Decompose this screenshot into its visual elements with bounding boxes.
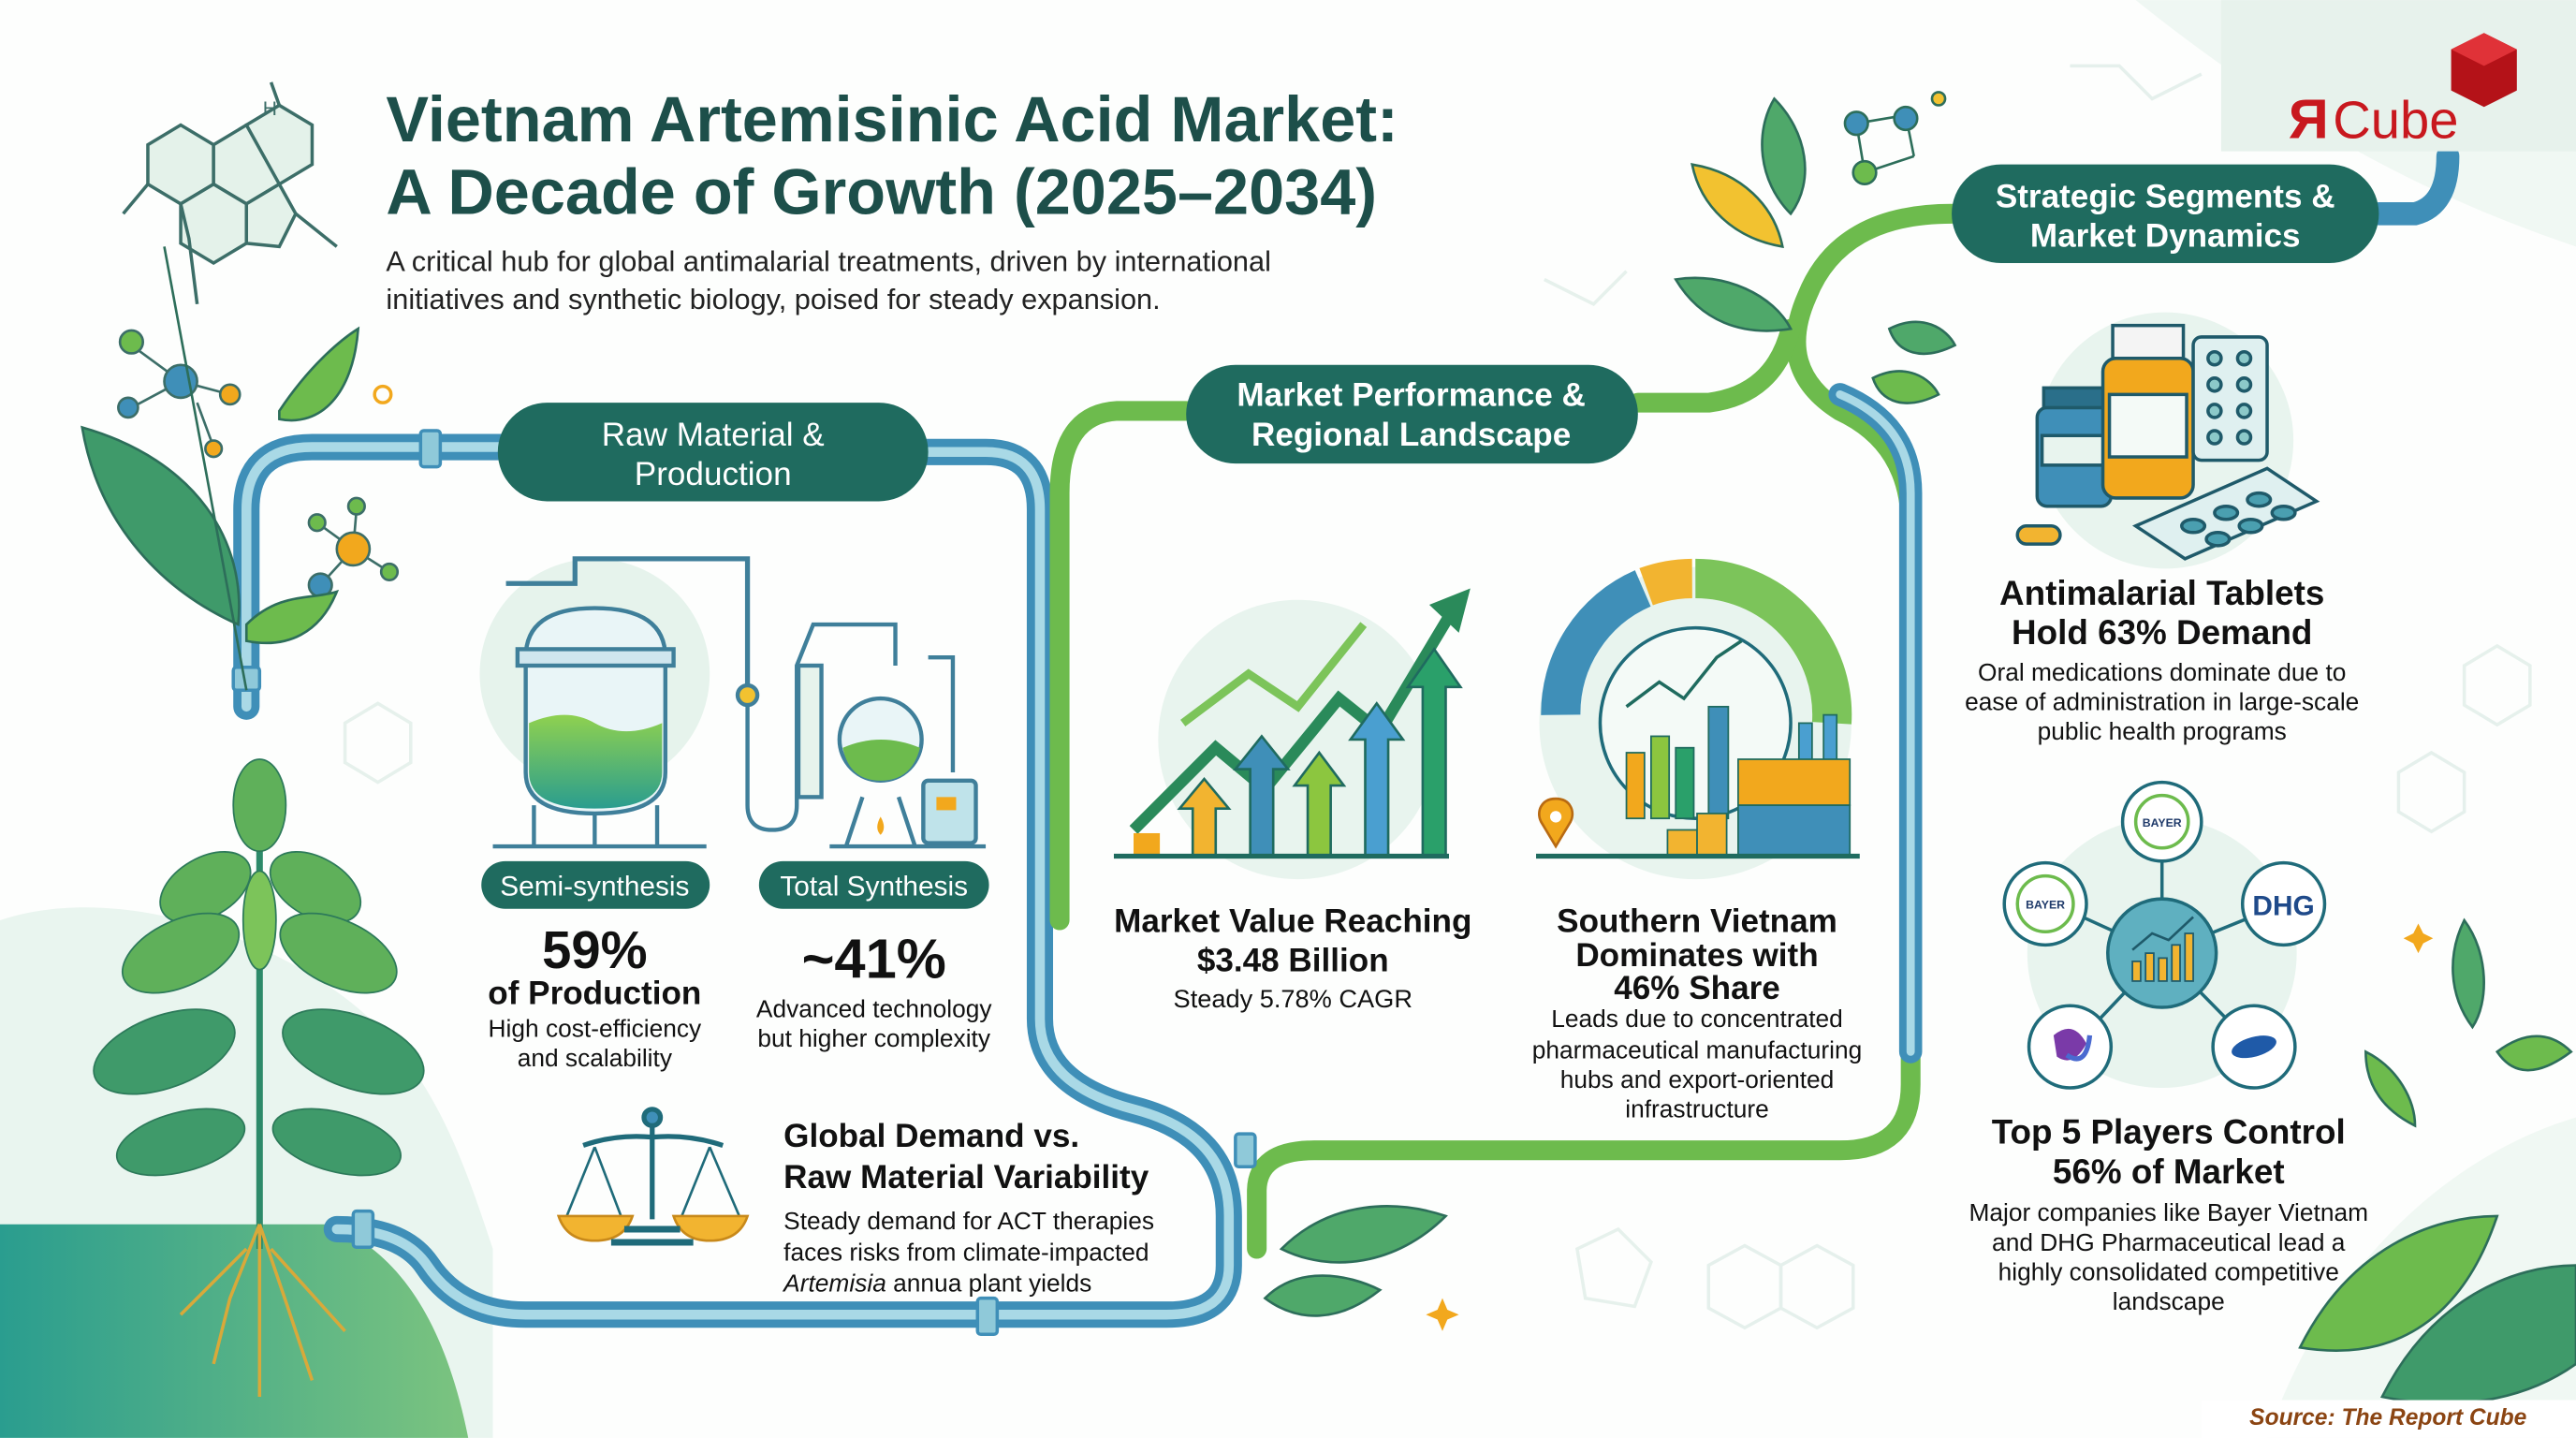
stat: 59% (488, 920, 702, 1072)
text: top 5 players (1969, 1113, 2368, 1315)
text: top 5 players: Top 5 Players Control (1992, 1113, 2346, 1152)
logo: RCube: Cube (2333, 91, 2458, 150)
stat: 59%: and scalability (518, 1044, 673, 1072)
icon: balance scale (559, 1109, 748, 1242)
pill: total synthesis (759, 861, 989, 909)
text: market value: $3.48 Billion (1197, 942, 1389, 978)
text: global demand: Raw Material Variability (783, 1159, 1149, 1196)
logo: RCube (2221, 0, 2576, 152)
pill: semi-synthesis (481, 861, 710, 909)
pill: semi-synthesis: Semi-synthesis (500, 872, 689, 902)
text: southern vietnam: Southern Vietnam (1557, 902, 1837, 939)
chart: growth arrows (1114, 588, 1471, 879)
icon: player network (2004, 783, 2324, 1088)
icon: player network: BAYER (2026, 899, 2065, 912)
text: market value: Steady 5.78% CAGR (1174, 984, 1412, 1013)
pipe network (233, 156, 2448, 1334)
text: southern vietnam: 46% Share (1614, 970, 1780, 1006)
sparkles (1426, 924, 2433, 1331)
icon: molecules left (118, 330, 398, 596)
text: global demand: Global Demand vs. (783, 1118, 1079, 1154)
icon: reactor and flasks (479, 559, 986, 846)
text: southern vietnam: Dominates with (1575, 937, 1819, 974)
icon: medicine bottles and tablets (2017, 313, 2317, 568)
pill: raw material: Production (635, 456, 792, 492)
pill: raw material (498, 403, 929, 501)
text: antimalarial tablets (1965, 574, 2359, 745)
logo: RCube: Я (2289, 88, 2329, 151)
icon: player network: DHG (2252, 891, 2315, 922)
text: market value: Market Value Reaching (1114, 902, 1471, 939)
text: southern vietnam: hubs and export-oriented (1560, 1065, 1834, 1093)
icon: molecule top-left: H (263, 98, 277, 120)
text: global demand: faces risks from climate-impacted (783, 1238, 1149, 1266)
text: top 5 players: highly consolidated competitive (1998, 1257, 2339, 1285)
pill: market performance: Regional Landscape (1251, 417, 1571, 453)
text: global demand (782, 1118, 1154, 1298)
stat: 59%: of Production (488, 976, 701, 1012)
pill: raw material: Raw Material & (602, 417, 825, 453)
text: antimalarial tablets: Oral medications dominate due to (1978, 658, 2346, 686)
stat: 41% (756, 927, 992, 1052)
text: antimalarial tablets: public health programs (2038, 717, 2287, 745)
text: southern vietnam: Leads due to concentrated (1551, 1005, 1843, 1033)
text: top 5 players: and DHG Pharmaceutical lead a (1992, 1228, 2346, 1256)
stat: 41%: Advanced technology (756, 995, 992, 1023)
pill: market performance (1186, 365, 1638, 463)
pill: strategic segments: Strategic Segments & (1996, 178, 2335, 214)
text: top 5 players: landscape (2113, 1287, 2225, 1315)
text: global demand: Steady demand for ACT therapies (783, 1207, 1154, 1235)
text: antimalarial tablets: Hold 63% Demand (2012, 613, 2312, 652)
subtitle: initiatives and synthetic biology, poised for steady expansion. (386, 283, 1161, 315)
chart: donut and industry (1536, 567, 1860, 879)
subtitle: A critical hub for global antimalarial treatments, driven by international (386, 245, 1271, 278)
text: antimalarial tablets: Antimalarial Tablets (1999, 574, 2324, 612)
pill: strategic segments: Market Dynamics (2030, 217, 2301, 254)
text: southern vietnam: infrastructure (1625, 1095, 1769, 1123)
title (386, 83, 1398, 227)
stat: 59%: 59% (542, 920, 648, 979)
icon: player network: BAYER (2143, 816, 2182, 829)
source: Source: The Report Cube (2249, 1405, 2526, 1431)
ground blob (0, 1225, 468, 1438)
stat: 41%: ~41% (802, 927, 946, 990)
text: southern vietnam (1532, 902, 1862, 1123)
pill: strategic segments (1952, 165, 2378, 263)
stat: 41%: but higher complexity (757, 1024, 991, 1052)
icon: molecule top-left (124, 82, 337, 304)
text: southern vietnam: pharmaceutical manufacturing (1532, 1035, 1862, 1064)
text: antimalarial tablets: ease of administration in large-scale (1965, 687, 2359, 715)
pill: market performance: Market Performance & (1237, 377, 1586, 414)
text: global demand: Artemisia annua plant yields (782, 1269, 1091, 1298)
stat: 59%: High cost-efficiency (489, 1015, 702, 1043)
title: Vietnam Artemisinic Acid Market: (386, 83, 1398, 155)
pill: total synthesis: Total Synthesis (780, 872, 968, 902)
text: top 5 players: Major companies like Bayer Vietnam (1969, 1198, 2368, 1226)
icon: leaves left (82, 246, 359, 690)
source (2202, 1400, 2576, 1438)
text: top 5 players: 56% of Market (2053, 1152, 2285, 1191)
title: A Decade of Growth (2025–2034) (386, 155, 1377, 227)
icon: artemisia plant (82, 759, 435, 1397)
text: market value (1114, 902, 1471, 1013)
subtitle (386, 245, 1271, 315)
icon: leaves and molecule around pipe top (1265, 92, 2576, 1403)
